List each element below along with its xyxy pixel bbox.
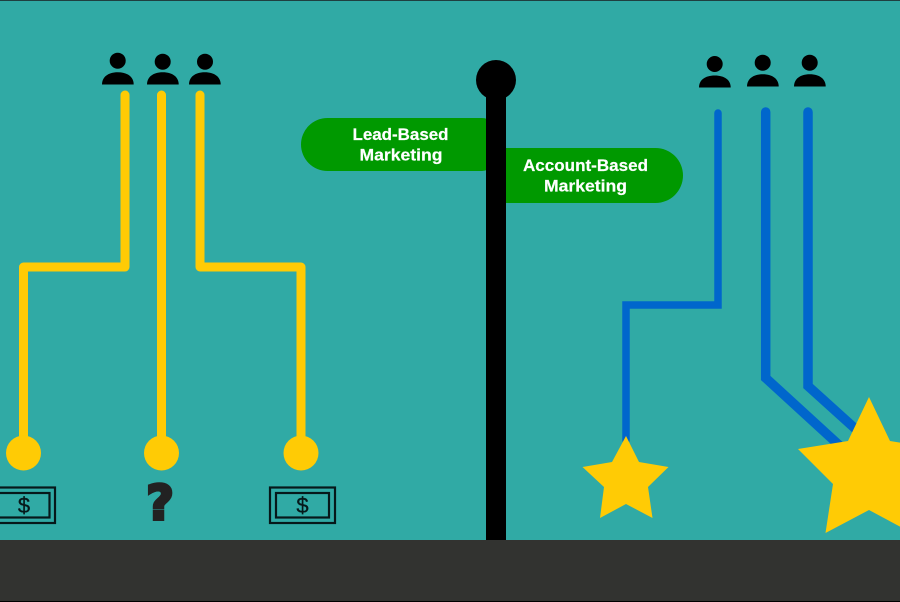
blue path lines <box>626 112 860 446</box>
panel: lead-based marketing paths <box>0 53 335 531</box>
right sign: account-based marketing: Marketing <box>544 178 627 196</box>
pole <box>486 90 506 540</box>
icon: right dollar bill: $ <box>296 493 309 518</box>
panel: account-based marketing paths <box>582 55 900 533</box>
right sign: account-based marketing: Account-Based <box>523 157 648 175</box>
pole top ball <box>476 60 516 100</box>
icon: large star <box>798 397 900 533</box>
left sign: lead-based marketing <box>301 118 496 171</box>
left sign: lead-based marketing: Marketing <box>360 146 442 164</box>
yellow path lines <box>24 95 301 450</box>
icons: account-based people <box>699 55 826 88</box>
right sign: account-based marketing <box>496 148 683 203</box>
left sign: lead-based marketing: Lead-Based <box>352 126 448 144</box>
icon: left dollar bill: $ <box>18 493 30 518</box>
icons: lead-based people <box>102 53 221 84</box>
yellow end circles <box>6 436 318 470</box>
ground band <box>0 540 900 602</box>
icon: left dollar bill <box>0 488 55 523</box>
icon: small star <box>582 436 668 518</box>
icon: right dollar bill <box>270 488 335 523</box>
signpost <box>301 60 683 540</box>
icon: question mark: ? <box>146 476 174 532</box>
